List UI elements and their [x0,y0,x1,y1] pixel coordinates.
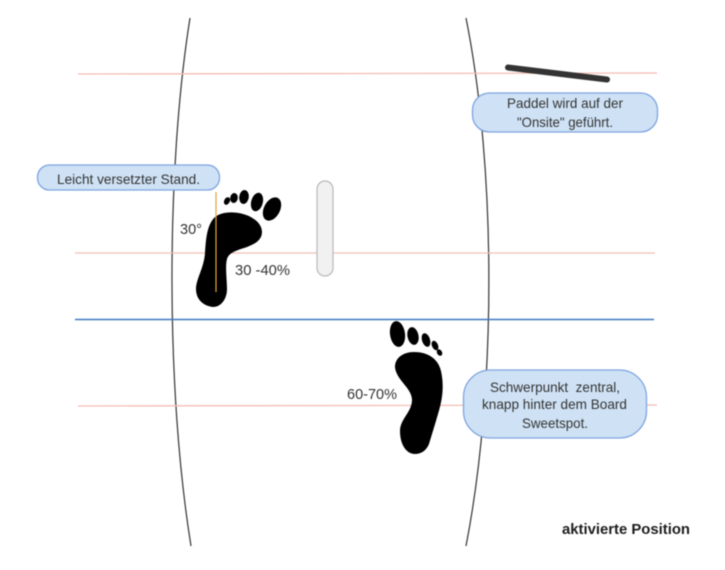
callout: centre of gravity: Schwerpunkt zentral, [490,379,620,395]
angle guide line [215,192,217,292]
callout: paddle position [472,93,658,132]
callout: centre of gravity: knapp hinter dem Board [482,396,627,412]
callout: stance: Leicht versetzter Stand. [57,171,200,187]
callout: paddle position: Paddel wird auf der [507,95,623,111]
callout: stance [38,165,220,190]
board centre line [75,318,654,320]
paddle [508,68,607,80]
board outline [172,18,489,546]
caption: aktivierte Position [562,522,690,538]
icon: front footprint [196,189,285,307]
label: 30 degrees: 30° [180,221,202,238]
centre handle marker [317,181,333,276]
label: front foot weight: 30 -40% [235,262,290,279]
callout: centre of gravity [464,370,646,438]
callout: paddle position: "Onsite" geführt. [517,114,613,130]
icon: rear footprint [388,320,443,454]
label: rear foot weight: 60-70% [347,386,397,403]
callout: centre of gravity: Sweetspot. [522,415,588,431]
